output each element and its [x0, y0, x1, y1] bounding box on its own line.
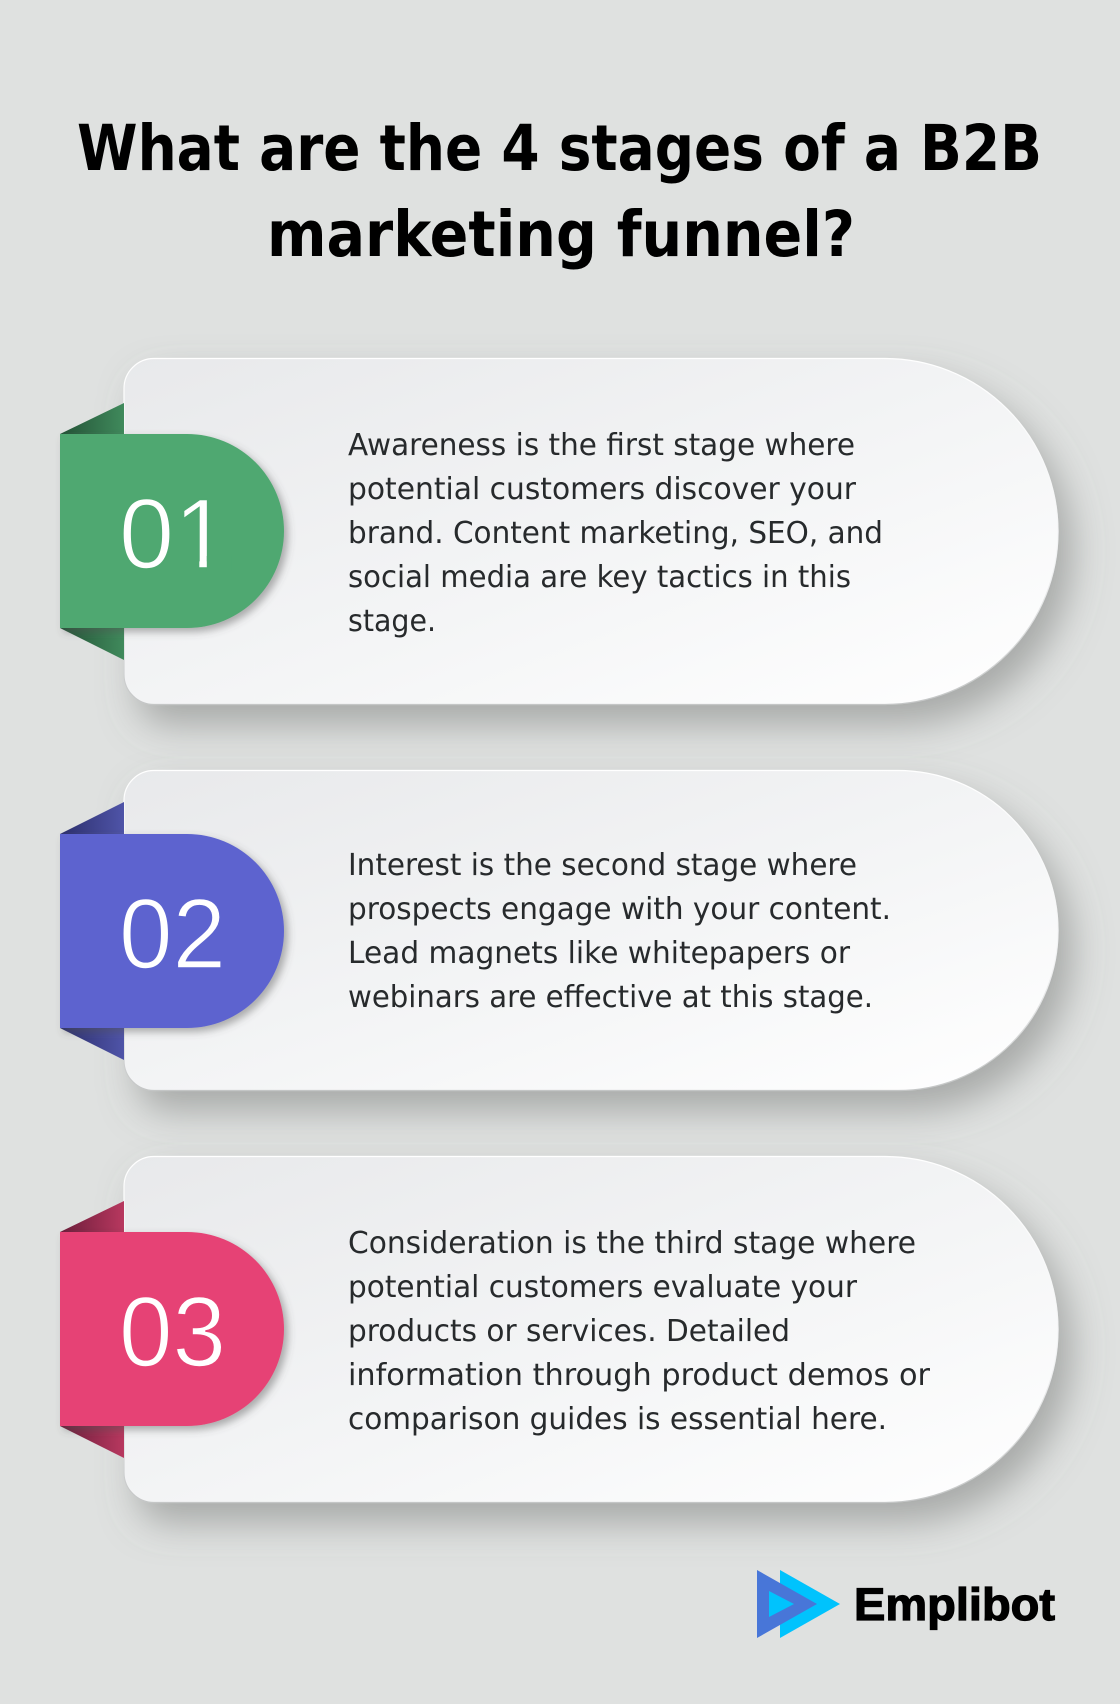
folded ribbon 02	[60, 802, 124, 1060]
folded ribbon 03	[60, 1201, 124, 1458]
description 01: potential customers discover your	[348, 472, 857, 507]
description 03: potential customers evaluate your	[348, 1270, 858, 1305]
title	[77, 112, 1042, 271]
badge 01	[60, 434, 284, 628]
panel: stage 01 awareness	[60, 358, 1058, 704]
description 03	[348, 1226, 931, 1437]
panel: stage 02 interest	[60, 770, 1058, 1090]
number 03: 03	[119, 1276, 226, 1387]
card 03	[124, 1156, 1058, 1502]
panel: stage 03 consideration	[60, 1156, 1058, 1502]
description 02: webinars are effective at this stage.	[348, 980, 873, 1015]
description 02: prospects engage with your content.	[348, 892, 891, 927]
description 03: products or services. Detailed	[348, 1314, 790, 1349]
badge 02	[60, 834, 284, 1028]
number 01: 01	[119, 478, 229, 589]
card 01	[124, 358, 1058, 704]
description 03: comparison guides is essential here.	[348, 1402, 887, 1437]
title: marketing funnel?	[267, 198, 855, 271]
description 01: Awareness is the first stage where	[348, 428, 855, 463]
description 03: information through product demos or	[348, 1358, 931, 1393]
card 02	[124, 770, 1058, 1090]
badge 03	[60, 1232, 284, 1426]
description 02	[348, 848, 891, 1015]
description 03: Consideration is the third stage where	[348, 1226, 916, 1261]
description 02: Lead magnets like whitepapers or	[348, 936, 851, 971]
description 02: Interest is the second stage where	[348, 848, 857, 883]
description 01: brand. Content marketing, SEO, and	[348, 516, 883, 551]
number 02: 02	[119, 878, 226, 989]
icon: play triangles	[757, 1570, 840, 1638]
wordmark: Emplibot	[854, 1579, 1055, 1630]
logo: Emplibot	[757, 1570, 1055, 1638]
description 01: stage.	[348, 604, 436, 639]
description 01	[348, 428, 883, 639]
description 01: social media are key tactics in this	[348, 560, 851, 595]
folded ribbon 01	[60, 403, 124, 660]
